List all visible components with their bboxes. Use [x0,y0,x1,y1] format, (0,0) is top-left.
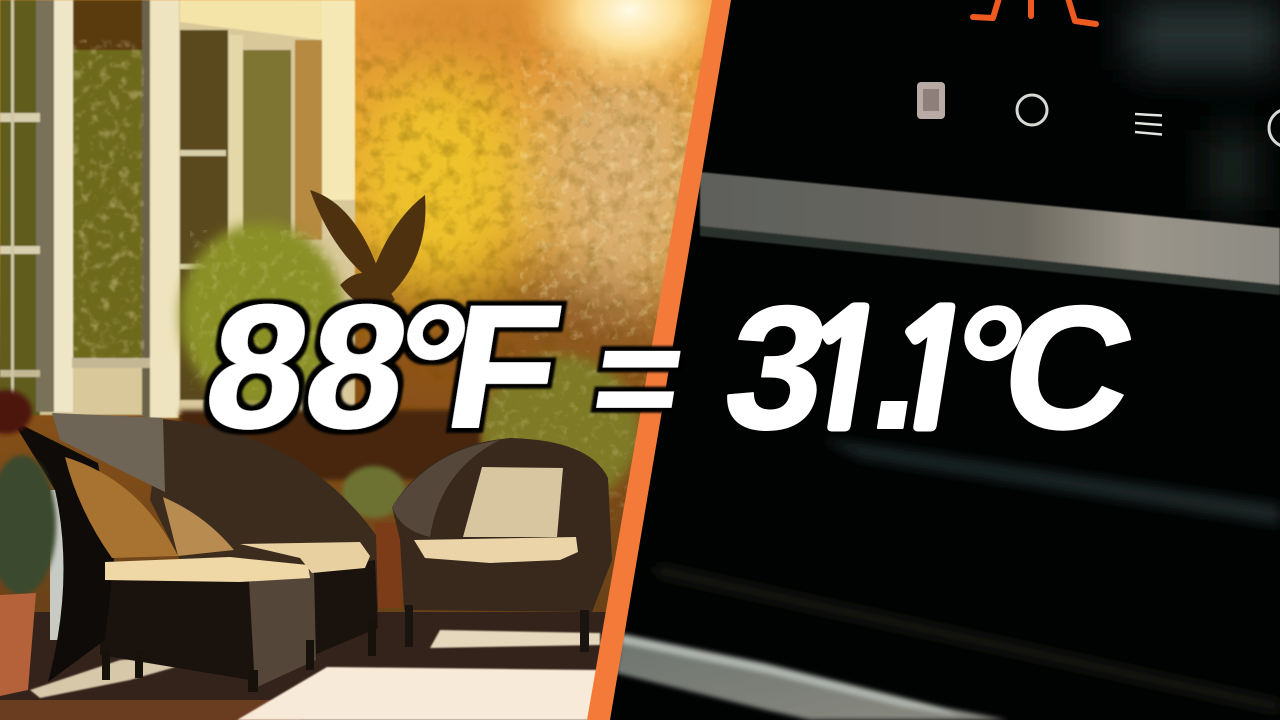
text: 31.1°C: 1 [782,293,906,453]
patio floor [0,612,606,720]
chair back [392,438,612,612]
touch icon: menu lines [1135,114,1162,134]
foliage: sunlit garden trees [355,0,740,520]
orange pillow [65,457,178,558]
panel: sunny patio photo scene [0,0,740,720]
sofa back [150,419,378,610]
text: 31.1°C: . [860,271,939,466]
door glass reflections [656,438,1280,712]
text: 88°F = with black outline: 88°F [194,270,573,465]
touch icon: circle [1017,95,1047,125]
sofa base [100,560,378,680]
shadow behind furniture [180,410,480,480]
light wicker panel [52,413,165,492]
orange diagonal divider [587,0,731,720]
shrubs and tropical plant [180,190,426,407]
text: 31.1°C: 3 [713,271,841,466]
potted plant [0,390,56,696]
headline: 88°F = 31.1°C [194,270,1147,466]
chair pillow [463,467,563,537]
panel: dark oven appliance scene [590,0,1280,720]
wicker armchair [392,438,612,652]
outer left wall strip [50,490,64,640]
hedge behind chairs [342,466,406,518]
text: 31.1°C: C [990,271,1147,466]
metal oven handle band [700,172,1280,295]
black arm [12,420,114,682]
sofa legs [102,629,376,692]
text: 31.1°C: ° [937,271,1038,466]
lower oven handle [616,633,1008,720]
seat cushion back [240,542,370,573]
seat cushion front [105,557,310,582]
house wall and windows [0,0,355,418]
wicker sofa [12,413,378,692]
tan pillow [163,497,234,556]
blurred reflection on control panel [1130,0,1280,210]
text: 88°F = with black outline: = [582,293,696,461]
oven digital display [973,0,1096,24]
touch icon: grid symbol [917,82,945,119]
touch icon: partial circle [1269,109,1280,147]
terracotta side table [375,523,402,608]
chair wicker edge [392,440,500,537]
chair legs [405,605,413,647]
wicker front panel [249,570,316,688]
text: 31.1°C: 1 [868,293,992,453]
chair cushion [414,537,578,563]
